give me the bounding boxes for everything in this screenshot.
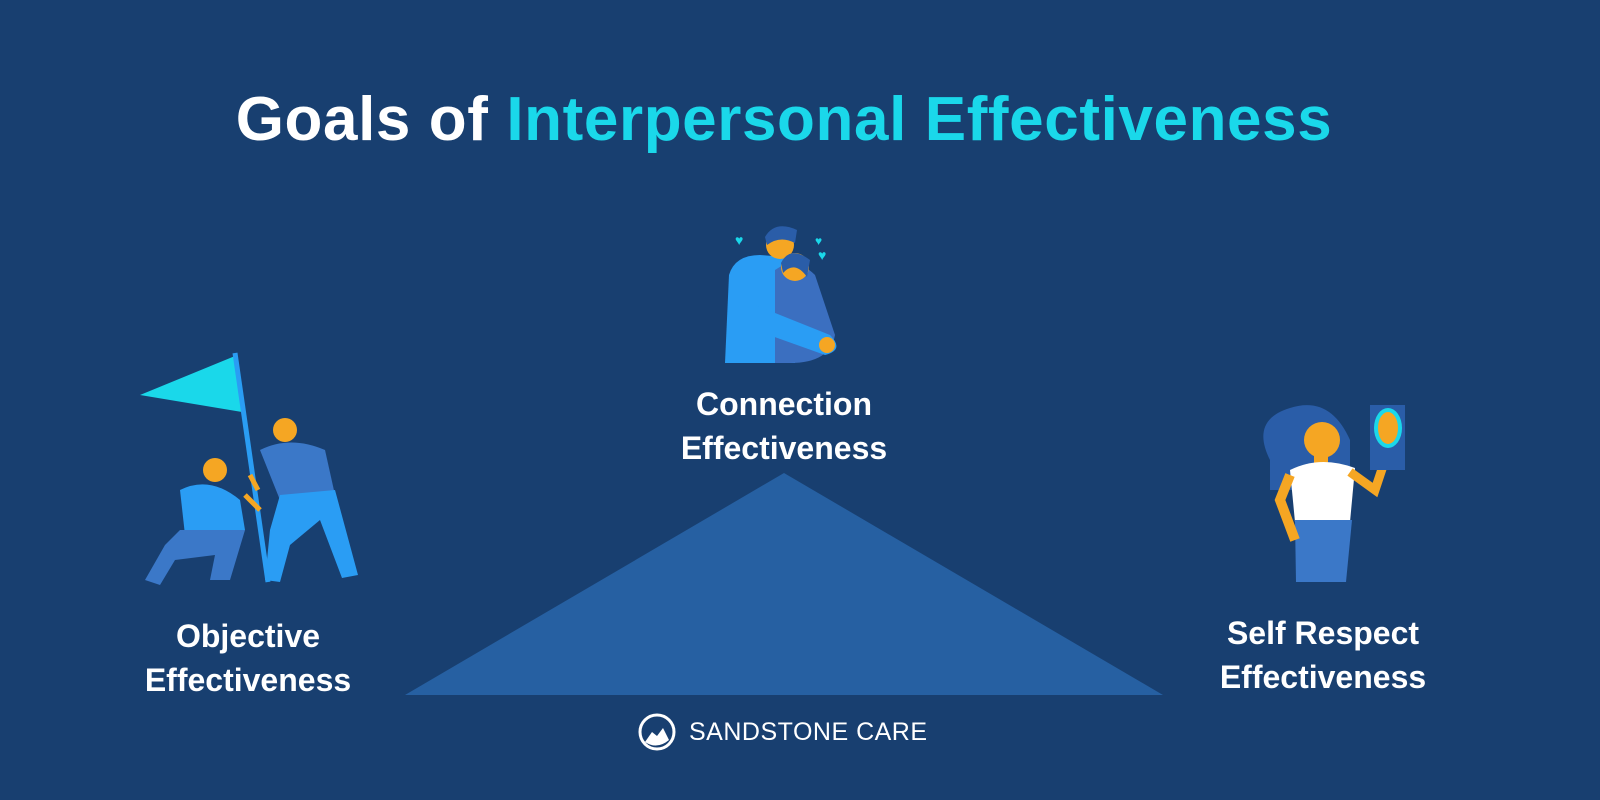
label: objective effectiveness: Effectiveness — [145, 662, 351, 698]
icon: connection couple hugging — [725, 226, 836, 363]
title: Goals of Interpersonal Effectiveness — [236, 85, 1332, 154]
icon: connection couple hugging: ♥ — [815, 234, 822, 248]
label: connection effectiveness — [681, 386, 887, 466]
label: objective effectiveness: Objective — [176, 618, 320, 654]
icon: connection couple hugging: ♥ — [818, 247, 826, 263]
icon: objective flag team — [140, 352, 358, 585]
logo: sandstone care: SANDSTONE CARE — [689, 718, 928, 746]
label: self respect effectiveness: Effectiveness — [1220, 659, 1426, 695]
label: connection effectiveness: Connection — [696, 386, 872, 422]
label: connection effectiveness: Effectiveness — [681, 430, 887, 466]
label: self respect effectiveness — [1220, 615, 1426, 695]
icon: self respect woman with mirror — [1263, 405, 1405, 582]
label: self respect effectiveness: Self Respect — [1227, 615, 1419, 651]
label: objective effectiveness — [145, 618, 351, 698]
logo: sandstone care — [638, 714, 928, 750]
icon: connection couple hugging: ♥ — [735, 232, 743, 248]
